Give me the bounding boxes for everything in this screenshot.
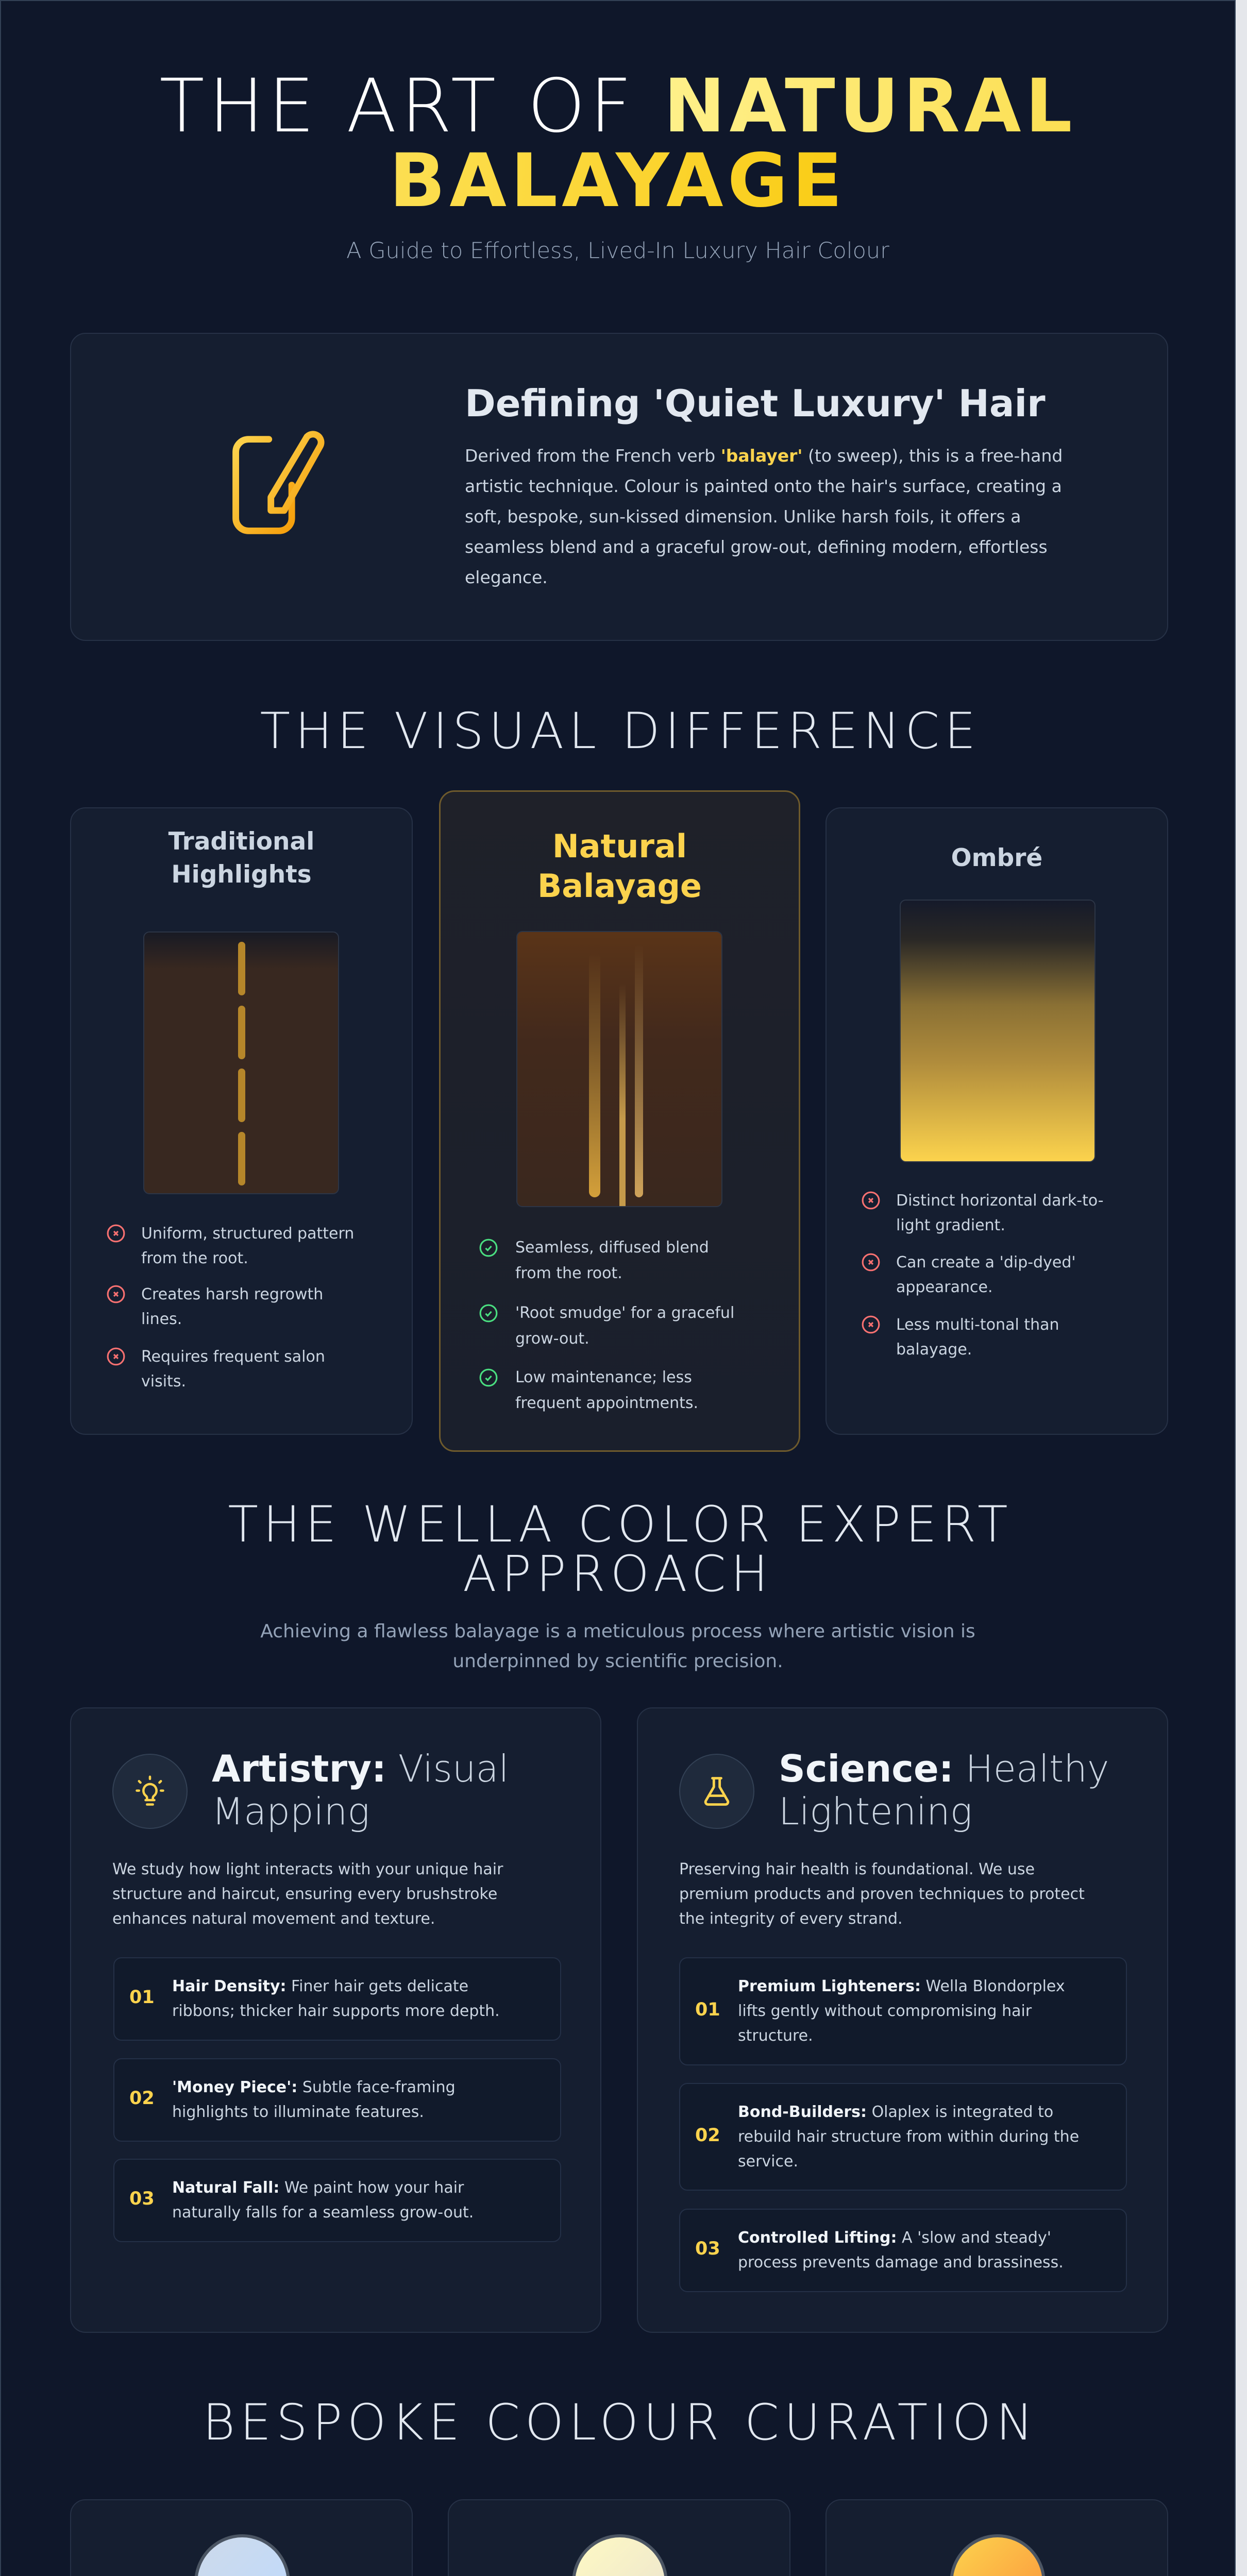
list: cons — [107, 1224, 354, 1391]
list: cons: appearance. — [896, 1278, 993, 1296]
heading: bespoke colour curation: BESPOKE COLOUR CURATION — [203, 2394, 1038, 2451]
list item 03: process prevents damage and brassiness. — [738, 2253, 1064, 2272]
list item 01 — [113, 1957, 561, 2041]
list item 01: Hair Density: Finer hair gets delicate — [172, 1977, 468, 1995]
list item 03: 03 — [129, 2189, 155, 2209]
list item 02: 02 — [695, 2125, 720, 2146]
text block: the integrity of every strand. — [679, 1910, 903, 1928]
list: cons: Distinct horizontal dark-to- — [896, 1192, 1104, 1210]
list: cons: lines. — [141, 1310, 182, 1328]
hair swatch: dashed stripe — [143, 931, 339, 1194]
text block: premium products and proven techniques to protect — [679, 1885, 1085, 1903]
title — [159, 63, 1076, 224]
list: cons: Less multi-tonal than — [896, 1316, 1059, 1334]
subheading: underpinned by scientific precision. — [452, 1651, 783, 1672]
list: cons: visits. — [141, 1372, 186, 1391]
panel: natural balayage (highlighted) — [439, 790, 800, 1452]
list: pros — [479, 1239, 734, 1412]
list: cons: Requires frequent salon — [141, 1348, 325, 1366]
list item 02: highlights to illuminate features. — [172, 2103, 424, 2121]
list item 01: structure. — [738, 2027, 813, 2045]
list item 02: service. — [738, 2153, 798, 2171]
list item 03 — [679, 2209, 1127, 2292]
swatch: warm — [950, 2534, 1046, 2576]
text block: enhances natural movement and texture. — [112, 1910, 435, 1928]
heading: Artistry: Visual — [212, 1747, 509, 1790]
list: pros: Low maintenance; less — [515, 1368, 692, 1386]
list: pros: 'Root smudge' for a graceful — [515, 1304, 734, 1322]
list item 01: Premium Lighteners: Wella Blondorplex — [738, 1977, 1065, 1995]
title: THE ART OF NATURAL — [159, 63, 1076, 149]
text block: elegance. — [465, 567, 548, 587]
list item 01: 01 — [695, 1999, 720, 2020]
title: BALAYAGE — [389, 138, 847, 224]
hair swatch: gradient — [900, 900, 1096, 1162]
list item 01 — [679, 1957, 1127, 2065]
hair swatch: blended strands — [516, 931, 722, 1207]
heading: Balayage — [537, 867, 702, 905]
list item 02 — [113, 2058, 561, 2142]
text block: structure and haircut, ensuring every brushstroke — [112, 1885, 497, 1903]
text block — [679, 1860, 1085, 1928]
subtitle: A Guide to Effortless, Lived-In Luxury Hair Colour — [346, 238, 889, 264]
icon: flask — [679, 1754, 754, 1829]
list: pros: from the root. — [515, 1264, 622, 1282]
subheading: Achieving a flawless balayage is a meticulous process where artistic vision is — [260, 1621, 975, 1642]
list: cons: balayage. — [896, 1341, 972, 1359]
heading — [779, 1747, 1109, 1833]
list item 02: Bond-Builders: Olaplex is integrated to — [738, 2103, 1053, 2121]
text block: soft, bespoke, sun-kissed dimension. Unlike harsh foils, it offers a — [465, 506, 1021, 527]
heading: the visual difference: THE VISUAL DIFFERENCE — [260, 702, 981, 760]
list: cons: Creates harsh regrowth — [141, 1285, 323, 1303]
panel: ombre — [825, 807, 1168, 1435]
panel: artistry — [70, 1707, 601, 2333]
list item 01: lifts gently without compromising hair — [738, 2002, 1032, 2020]
list item 02 — [679, 2083, 1127, 2191]
heading: Highlights — [171, 860, 312, 889]
heading: wella color expert approach: THE WELLA COLOR EXPERT — [228, 1496, 1013, 1553]
list item 01: 01 — [129, 1987, 155, 2008]
subheading — [260, 1621, 975, 1672]
panel: neutral tones — [448, 2499, 790, 2576]
heading — [168, 827, 314, 889]
text block: artistic technique. Colour is painted onto the hair's surface, creating a — [465, 476, 1062, 496]
text block: Preserving hair health is foundational. We use — [679, 1860, 1035, 1878]
panel: traditional highlights — [70, 807, 413, 1435]
heading: wella color expert approach: APPROACH — [463, 1545, 773, 1603]
list item 02: rebuild hair structure from within during the — [738, 2128, 1079, 2146]
list item 03: Natural Fall: We paint how your hair — [172, 2179, 464, 2197]
panel: cool tones — [70, 2499, 413, 2576]
list item 01: ribbons; thicker hair supports more depth. — [172, 2002, 500, 2020]
heading: wella color expert approach — [228, 1496, 1013, 1603]
list: cons: from the root. — [141, 1249, 248, 1267]
swatch: neutral — [572, 2534, 668, 2576]
list item 03: Controlled Lifting: A 'slow and steady' — [738, 2229, 1051, 2247]
swatch: cool — [194, 2534, 290, 2576]
text block — [465, 446, 1063, 587]
list: cons: Uniform, structured pattern — [141, 1225, 354, 1243]
heading: Mapping — [212, 1790, 370, 1833]
heading — [537, 827, 702, 905]
heading: Traditional — [168, 827, 314, 856]
icon: pencil square — [232, 431, 325, 534]
list: pros: frequent appointments. — [515, 1394, 698, 1412]
text block: Derived from the French verb 'balayer' (to sweep), this is a free-hand — [465, 446, 1063, 466]
panel: defining quiet luxury — [70, 333, 1168, 641]
heading — [212, 1747, 509, 1833]
text block: seamless blend and a graceful grow-out, defining modern, effortless — [465, 537, 1048, 557]
list: pros: grow-out. — [515, 1330, 589, 1348]
list item 03: 03 — [695, 2239, 720, 2259]
list item 02: 02 — [129, 2088, 155, 2109]
text block: We study how light interacts with your unique hair — [112, 1860, 503, 1878]
panel: science — [637, 1707, 1168, 2333]
list item 02: 'Money Piece': Subtle face-framing — [172, 2078, 456, 2096]
heading: Lightening — [779, 1790, 972, 1833]
list: cons: Can create a 'dip-dyed' — [896, 1253, 1076, 1272]
list item 03 — [113, 2159, 561, 2242]
list: cons — [862, 1191, 1104, 1359]
heading: Ombré — [951, 844, 1042, 872]
list item 03: naturally falls for a seamless grow-out. — [172, 2204, 474, 2222]
heading: Defining 'Quiet Luxury' Hair — [465, 382, 1046, 425]
list: pros: Seamless, diffused blend — [515, 1239, 709, 1257]
text block — [112, 1860, 503, 1928]
icon: lightbulb — [112, 1754, 188, 1829]
heading: Natural — [552, 827, 687, 865]
list: cons: light gradient. — [896, 1216, 1005, 1234]
heading: Science: Healthy — [779, 1747, 1109, 1790]
panel: warm tones — [825, 2499, 1168, 2576]
